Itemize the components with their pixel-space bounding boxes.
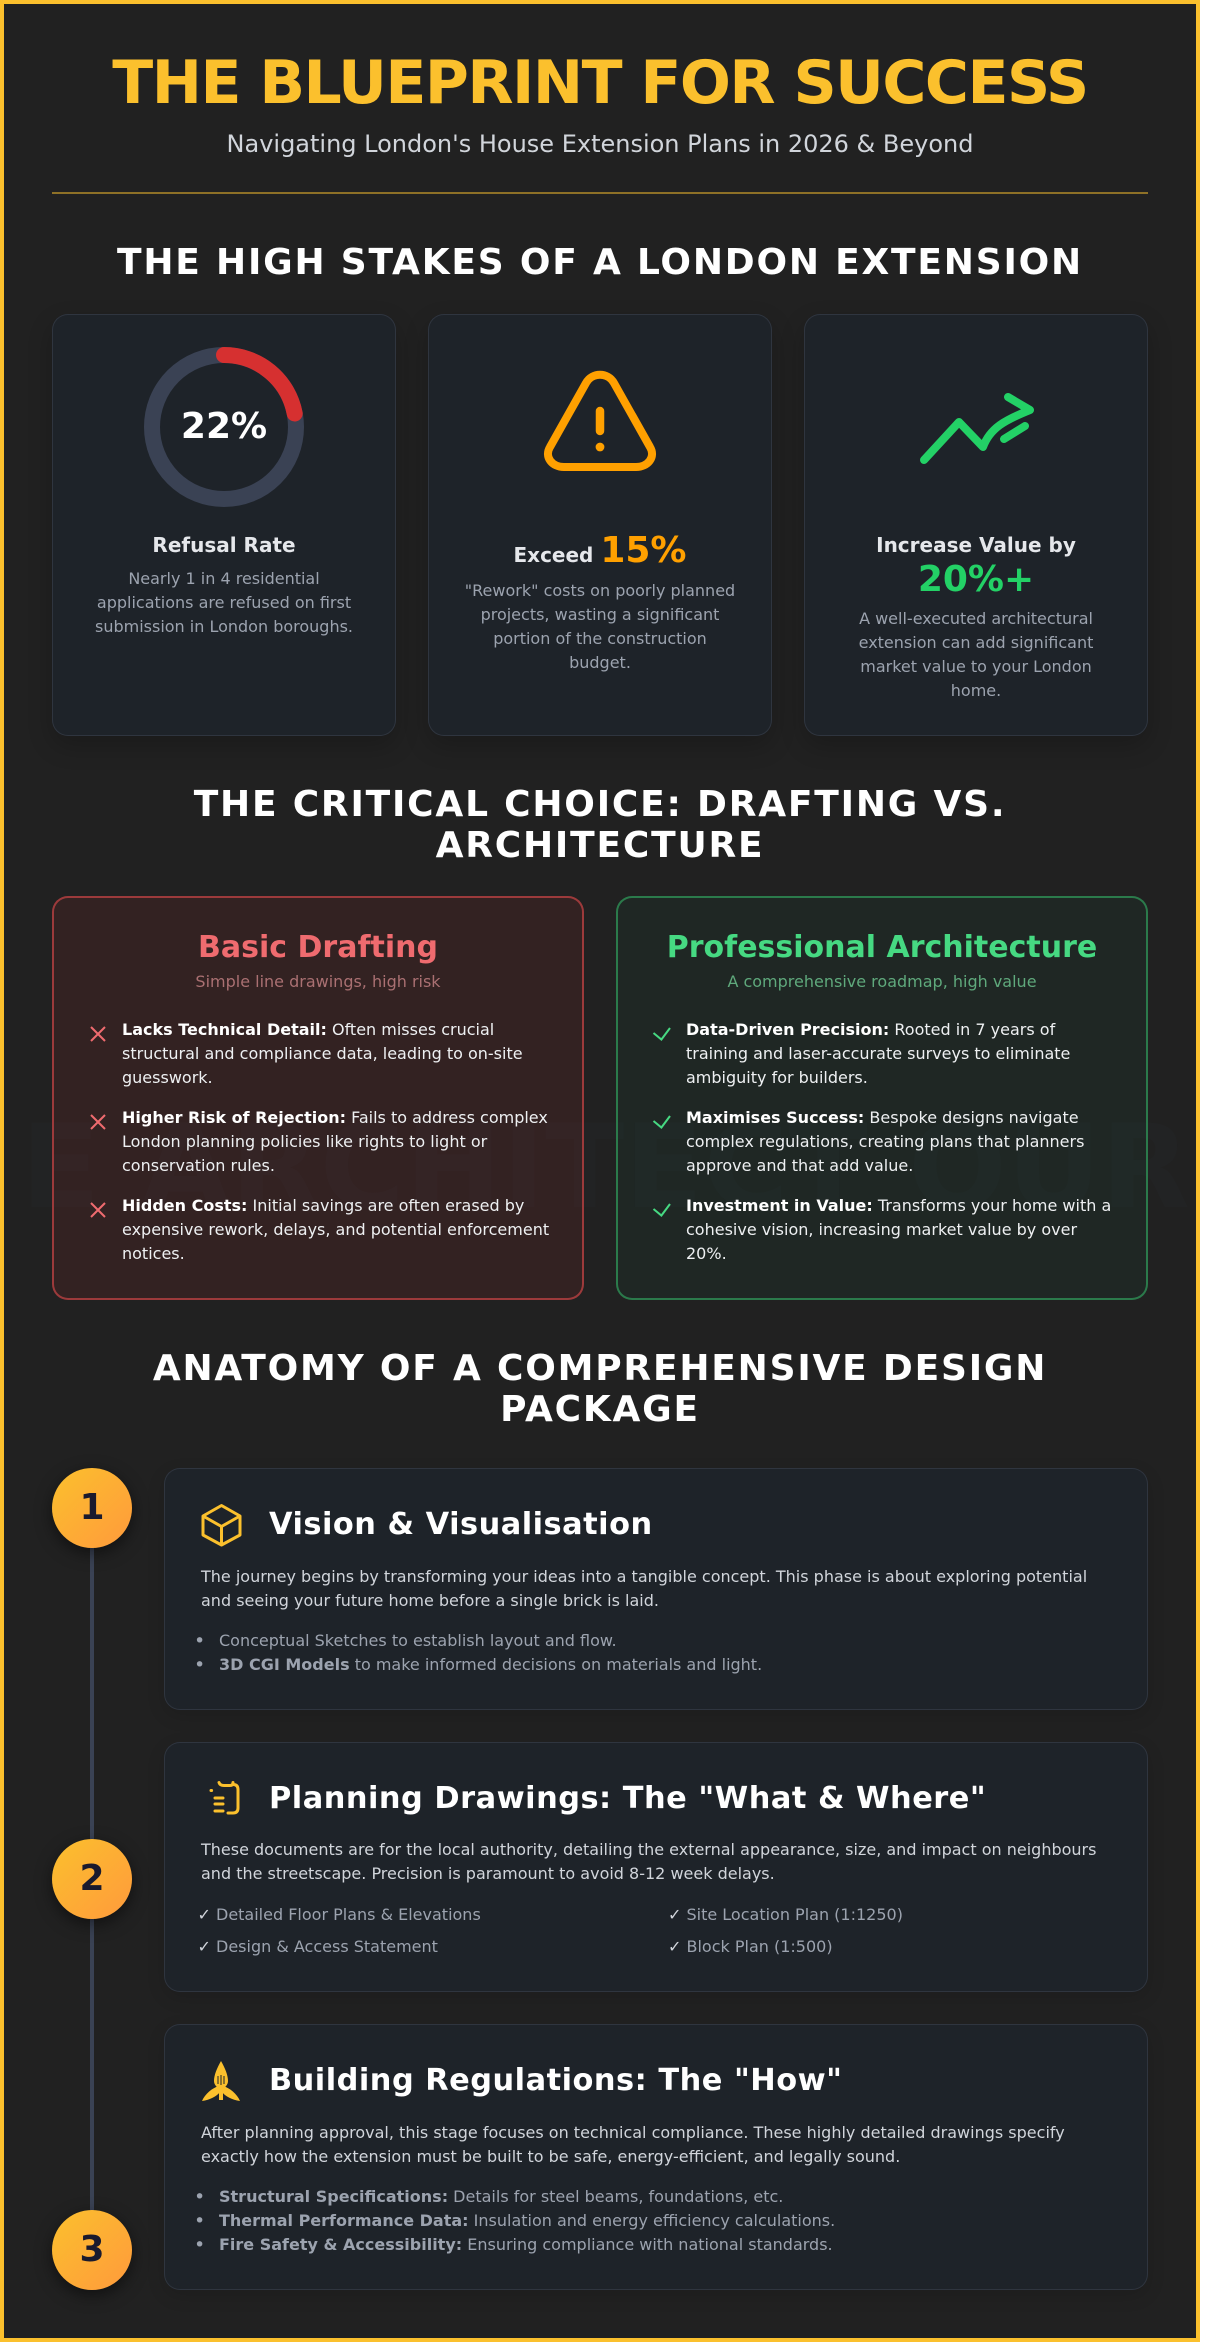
stat description — [466, 584, 734, 672]
heading: critical choice — [194, 790, 1001, 858]
benefit: investment in value: Investment in Value: Transforms your home with a — [686, 1196, 1111, 1215]
panel: increase value — [804, 314, 1148, 736]
bullet list: Structural Specifications: Details for steel beams, foundations, etc. — [219, 2187, 783, 2206]
heading: anatomy of a design package: PACKAGE — [500, 1389, 700, 1430]
stat description: applications are refused on first — [97, 593, 351, 612]
panel: basic drafting — [52, 896, 584, 1300]
subtitle: Navigating London's House Extension Plans in 2026 & Beyond — [227, 130, 973, 158]
step number 1: 1 — [79, 1487, 105, 1528]
stat description: projects, wasting a significant — [481, 605, 719, 624]
stat description: submission in London boroughs. — [95, 617, 353, 636]
step number 1 — [52, 1468, 132, 1548]
header divider — [52, 192, 1148, 194]
watermark text: E ARCHITECT OUR — [21, 1100, 1190, 1235]
drawback: higher risk of rejection: London planning policies like rights to light or — [122, 1132, 487, 1151]
timeline line — [90, 1548, 94, 2210]
bullet markers: • — [194, 2210, 205, 2232]
step description — [201, 2126, 1064, 2166]
step description: After planning approval, this stage focuses on technical compliance. These highly detailed drawings specify — [201, 2123, 1065, 2142]
step description: These documents are for the local authority, detailing the external appearance, size, and impact on neighbours — [201, 1840, 1096, 1859]
step number 3 — [52, 2210, 132, 2290]
drawback: lacks technical detail — [122, 1023, 522, 1086]
title: THE BLUEPRINT FOR SUCCESS — [112, 48, 1088, 118]
drawback: lacks technical detail: Lacks Technical Detail: Often misses crucial — [122, 1020, 494, 1039]
chart: refusal rate donut — [144, 347, 304, 507]
benefit: maximises success — [686, 1111, 1084, 1174]
step description: and seeing your future home before a single brick is laid. — [201, 1591, 659, 1610]
bullet list — [219, 2190, 834, 2254]
bullet markers: • — [194, 2186, 205, 2208]
stat description: market value to your London — [860, 657, 1092, 676]
step description — [200, 1570, 1086, 1610]
stat label with value: Exceed 15% — [514, 530, 686, 571]
step heading: Vision & Visualisation — [269, 1507, 653, 1542]
checklist item: ✓ Site Location Plan (1:1250) — [668, 1905, 903, 1924]
step description: The journey begins by transforming your ideas into a tangible concept. This phase is about exploring potential — [201, 1567, 1087, 1586]
step number 2: 2 — [79, 1858, 105, 1899]
stat description: Nearly 1 in 4 residential — [128, 569, 320, 588]
bullet markers — [196, 1637, 202, 1666]
panel subtitle: A comprehensive roadmap, high value — [727, 972, 1037, 991]
icons: green checks — [652, 1027, 671, 1217]
drawback: lacks technical detail: structural and compliance data, leading to on-site — [122, 1044, 523, 1063]
checklist item: ✓ Design & Access Statement — [198, 1937, 438, 1956]
panel: professional architecture — [616, 896, 1148, 1300]
drawback: higher risk of rejection: conservation rules. — [122, 1156, 275, 1175]
benefit: investment in value: 20%. — [686, 1244, 727, 1263]
bullet list: Thermal Performance Data: Insulation and energy efficiency calculations. — [219, 2211, 835, 2230]
stat description — [859, 612, 1093, 696]
step heading: Planning Drawings: The "What & Where" — [269, 1781, 986, 1816]
step number 3: 3 — [79, 2229, 105, 2270]
panel: vision and visualisation — [164, 1468, 1148, 1710]
benefit: investment in value: cohesive vision, increasing market value by over — [686, 1220, 1077, 1239]
icon: warning triangle — [544, 370, 656, 471]
benefit: data-driven precision: training and laser-accurate surveys to eliminate — [686, 1044, 1070, 1063]
icons: red crosses — [90, 1026, 106, 1218]
panel: planning drawings — [164, 1742, 1148, 1992]
benefit: data-driven precision: ambiguity for builders. — [686, 1068, 868, 1087]
drawback: lacks technical detail: guesswork. — [122, 1068, 213, 1087]
stat label: Increase Value by — [876, 533, 1076, 557]
icon: cube — [202, 1504, 242, 1546]
benefit: maximises success: approve and that add value. — [686, 1156, 913, 1175]
drawback: hidden costs: Hidden Costs: Initial savings are often erased by — [122, 1196, 524, 1215]
bullet list: Fire Safety & Accessibility: Ensuring compliance with national standards. — [219, 2235, 833, 2254]
heading: high stakes: THE HIGH STAKES OF A LONDON EXTENSION — [117, 242, 1083, 283]
stat description: portion of the construction — [493, 629, 707, 648]
panel heading: Basic Drafting — [198, 930, 438, 965]
drawback: hidden costs: notices. — [122, 1244, 185, 1263]
drawback: hidden costs: expensive rework, delays, and potential enforcement — [122, 1220, 549, 1239]
benefit: data-driven precision — [686, 1023, 1070, 1086]
bullet list — [220, 1634, 760, 1674]
donut value: 22% — [181, 406, 267, 447]
panel heading: Professional Architecture — [667, 930, 1097, 965]
stat label: Refusal Rate — [152, 533, 296, 557]
drawback: higher risk of rejection — [122, 1111, 548, 1171]
benefit: maximises success: Maximises Success: Bespoke designs navigate — [686, 1108, 1079, 1127]
panel: rework costs — [428, 314, 772, 736]
heading: critical choice: THE CRITICAL CHOICE: DRAFTING VS. — [194, 784, 1006, 825]
step heading: Building Regulations: The "How" — [269, 2063, 842, 2098]
step number 2 — [52, 1839, 132, 1919]
bullet markers: • — [194, 1630, 205, 1652]
stat description: A well-executed architectural — [859, 609, 1093, 628]
stat value: 20%+ — [918, 559, 1034, 600]
stat description: extension can add significant — [859, 633, 1093, 652]
icon: rising trend arrow — [920, 393, 1034, 464]
bullet markers — [196, 2193, 202, 2246]
checklist item: ✓ Detailed Floor Plans & Elevations — [198, 1905, 481, 1924]
checklist item: ✓ Block Plan (1:500) — [668, 1937, 833, 1956]
panel: building regulations — [164, 2024, 1148, 2290]
step description: and the streetscape. Precision is paramount to avoid 8-12 week delays. — [201, 1864, 775, 1883]
stat description — [96, 572, 352, 636]
bullet markers: • — [194, 2234, 205, 2256]
heading: critical choice: ARCHITECTURE — [436, 825, 764, 866]
step description: exactly how the extension must be built to be safe, energy-efficient, and legally sound. — [201, 2147, 900, 2166]
bullet list: Conceptual Sketches to establish layout and flow. — [219, 1631, 617, 1650]
heading: anatomy of a design package — [153, 1354, 1042, 1422]
stat description: budget. — [569, 653, 631, 672]
drawback: hidden costs — [122, 1199, 549, 1259]
bullet list: 3D CGI Models to make informed decisions on materials and light. — [219, 1655, 762, 1674]
bullet markers: • — [194, 1654, 205, 1676]
panel subtitle: Simple line drawings, high risk — [195, 972, 441, 991]
panel: refusal rate — [52, 314, 396, 736]
drawback: higher risk of rejection: Higher Risk of Rejection: Fails to address complex — [122, 1108, 548, 1127]
stat description: "Rework" costs on poorly planned — [465, 581, 735, 600]
benefit: data-driven precision: Data-Driven Precision: Rooted in 7 years of — [686, 1020, 1055, 1039]
step description — [200, 1843, 1096, 1882]
stat description: home. — [951, 681, 1001, 700]
benefit: investment in value — [686, 1199, 1110, 1259]
benefit: maximises success: complex regulations, creating plans that planners — [686, 1132, 1084, 1151]
heading: anatomy of a design package: ANATOMY OF A COMPREHENSIVE DESIGN — [153, 1348, 1047, 1389]
